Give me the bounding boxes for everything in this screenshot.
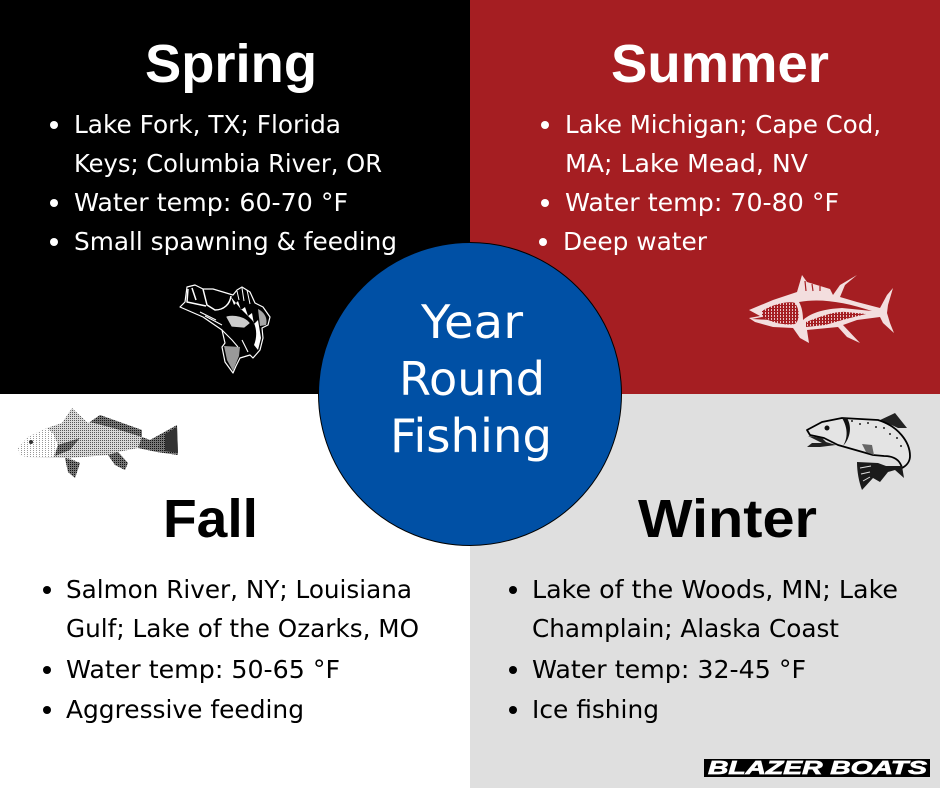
list: summer facts: MA; Lake Mead, NV <box>565 149 808 178</box>
title: Year Round Fishing: Fishing <box>390 409 552 463</box>
list: spring facts: Keys; Columbia River, OR <box>74 149 382 178</box>
list: spring facts: Lake Fork, TX; Florida <box>74 110 341 139</box>
heading: Summer: Summer <box>611 34 829 94</box>
list: winter facts: Ice fishing <box>532 695 659 724</box>
panel: winter <box>470 394 940 788</box>
title: Year Round Fishing: Round <box>399 352 545 406</box>
logo: Blazer Boats: BLAZER BOATS <box>708 758 927 778</box>
heading: Spring: Spring <box>145 34 317 94</box>
list: fall facts: Gulf; Lake of the Ozarks, MO <box>66 614 419 643</box>
panel: spring <box>0 0 470 394</box>
list: fall facts <box>43 575 419 724</box>
list: winter facts: Champlain; Alaska Coast <box>532 614 839 643</box>
list: winter facts: Lake of the Woods, MN; Lake <box>532 575 898 604</box>
heading: Winter: Winter <box>638 489 817 549</box>
list: summer facts: Lake Michigan; Cape Cod, <box>565 110 881 139</box>
panel: summer <box>470 0 940 394</box>
list: fall facts: Aggressive feeding <box>66 695 304 724</box>
list: winter facts: Water temp: 32-45 °F <box>532 655 806 684</box>
icon: tuna <box>749 275 894 343</box>
list: spring facts: Water temp: 60-70 °F <box>74 188 348 217</box>
list: summer facts <box>539 110 881 256</box>
icon: drum fish <box>18 408 178 478</box>
center circle <box>318 242 622 546</box>
title: Year Round Fishing: Year <box>420 295 523 349</box>
title: Year Round Fishing <box>390 295 552 463</box>
heading: Fall: Fall <box>163 489 258 549</box>
icon: trout <box>807 413 910 490</box>
list: summer facts: Water temp: 70-80 °F <box>565 188 839 217</box>
icon: bass <box>180 285 270 373</box>
logo: Blazer Boats <box>704 758 930 778</box>
panel: fall <box>0 394 470 788</box>
list: fall facts: Water temp: 50-65 °F <box>66 655 340 684</box>
list: spring facts <box>50 110 397 256</box>
list: winter facts <box>509 575 898 724</box>
list: spring facts: Small spawning & feeding <box>74 227 397 256</box>
list: fall facts: Salmon River, NY; Louisiana <box>66 575 412 604</box>
list: summer facts: Deep water <box>563 227 708 256</box>
